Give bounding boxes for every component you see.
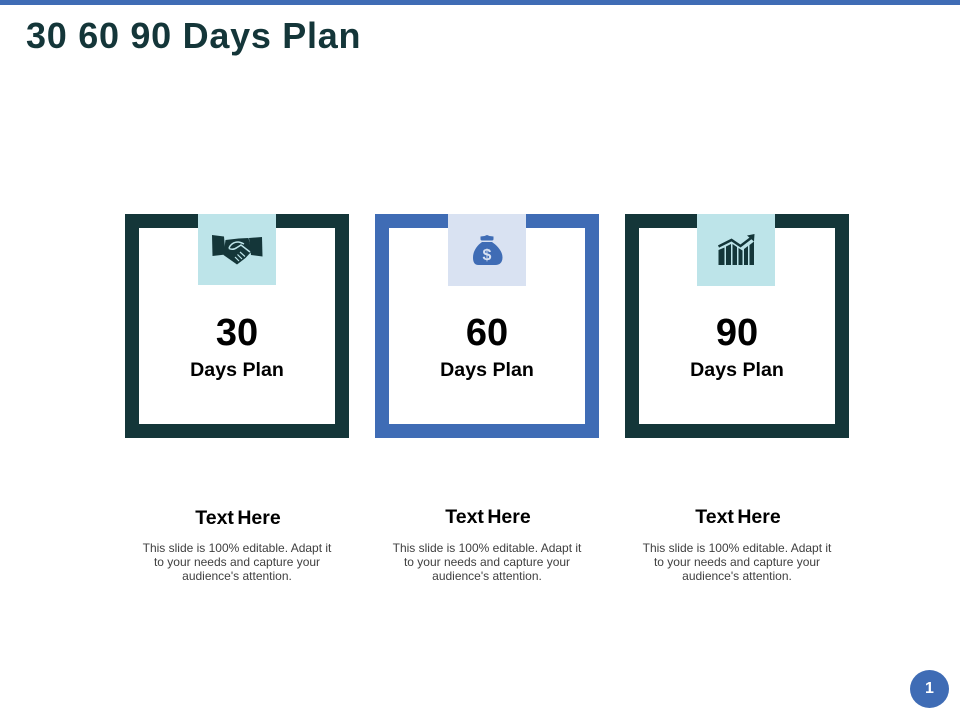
heading: Text Here <box>695 506 781 528</box>
body text: to your needs and capture your <box>404 555 570 569</box>
label: days plan: Days Plan <box>440 359 534 381</box>
frame: 90 days <box>625 214 849 438</box>
number: 60: 60 <box>466 312 508 354</box>
body text: This slide is 100% editable. Adapt it <box>143 541 331 555</box>
body text <box>642 541 832 583</box>
number: 30: 30 <box>216 312 258 354</box>
text block: column 3 <box>642 506 832 583</box>
icon: handshake <box>198 214 276 285</box>
frame: 60 days <box>375 214 599 438</box>
frame: 30 days <box>125 214 349 438</box>
body text: audience's attention. <box>432 569 542 583</box>
icon: money bag: $ <box>483 247 492 264</box>
text block: column 1 <box>142 507 332 583</box>
label: days plan: Days Plan <box>190 359 284 381</box>
body text <box>392 541 582 583</box>
body text: audience's attention. <box>182 569 292 583</box>
text block: column 2 <box>392 506 582 583</box>
icon: growth chart <box>697 214 775 286</box>
panel: 30 days <box>125 214 349 438</box>
body text: to your needs and capture your <box>154 555 320 569</box>
page number badge <box>910 670 949 708</box>
body text: This slide is 100% editable. Adapt it <box>643 541 831 555</box>
top accent bar <box>0 0 960 5</box>
icon: money bag <box>448 214 526 286</box>
panel: 60 days <box>375 214 599 438</box>
body text: to your needs and capture your <box>654 555 820 569</box>
label: days plan: Days Plan <box>690 359 784 381</box>
body text <box>142 541 332 583</box>
page number badge: 1 <box>925 680 934 697</box>
body text: audience's attention. <box>682 569 792 583</box>
panel: 90 days <box>625 214 849 438</box>
number: 90: 90 <box>716 312 758 354</box>
title: 30 60 90 Days Plan <box>26 15 361 56</box>
body text: This slide is 100% editable. Adapt it <box>393 541 581 555</box>
heading: Text Here <box>445 506 531 528</box>
heading: Text Here <box>195 507 281 529</box>
